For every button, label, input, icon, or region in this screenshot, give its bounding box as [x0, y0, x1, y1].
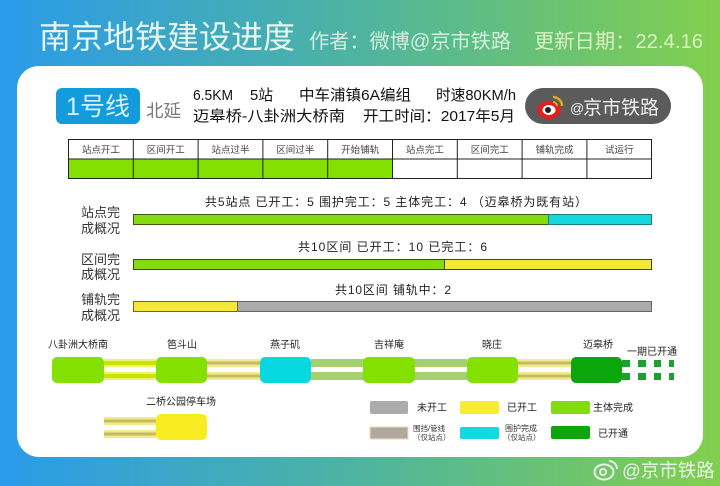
depot label: 二桥公园停车场: [146, 395, 216, 408]
legend: [370, 401, 633, 442]
station: 燕子矶: [260, 339, 311, 383]
progress table: [68, 139, 652, 179]
legend: main complete: [551, 401, 633, 414]
completed cells: [68, 159, 392, 178]
station: 晓庄: 晓庄: [482, 338, 502, 351]
extension label: 北延: [146, 101, 181, 121]
table headers: 区间过半: [276, 144, 314, 156]
icon: weibo outline: [594, 461, 617, 480]
legend: enclosure/pipeline: （仅站点）: [413, 432, 450, 442]
station: 笆斗山: 笆斗山: [167, 338, 197, 351]
update date: 更新日期：22.4.16: [534, 30, 703, 53]
phase 1 label: 一期已开通: [627, 346, 677, 358]
stats: 共10区间 铺轨中：2: [335, 282, 451, 297]
table headers: 站点过半: [211, 144, 250, 156]
stats: 共10区间 已开工：10 已完工：6: [298, 239, 487, 254]
bar: [134, 214, 652, 224]
table headers: 区间开工: [147, 144, 185, 156]
label: [81, 252, 120, 282]
track laying progress: [81, 282, 652, 323]
watermark: @京市铁路: [622, 460, 715, 481]
table headers: 站点完工: [406, 144, 444, 156]
station progress: [81, 194, 652, 236]
legend: opened: [551, 426, 628, 440]
table headers: 区间完工: [471, 144, 509, 156]
line diagram: [48, 338, 677, 383]
table headers: 试运行: [605, 144, 634, 156]
station: 八卦洲大桥南: [48, 338, 108, 383]
table headers: 铺轨完成: [535, 144, 574, 156]
station: 笆斗山: [156, 338, 207, 383]
track: main done: [311, 359, 467, 380]
legend: enclosure/pipeline: 围挡/管线: [413, 423, 446, 433]
line info: 迈皋桥-八卦洲大桥南: [193, 108, 345, 125]
station: 吉祥庵: [363, 338, 415, 383]
stations: [48, 338, 622, 383]
line info: 开工时间：2017年5月: [363, 108, 515, 125]
track: started: [207, 359, 260, 380]
station: 迈皋桥: [571, 338, 622, 383]
bar: [134, 260, 652, 270]
station: 迈皋桥: 迈皋桥: [583, 338, 613, 351]
depot track: [104, 417, 156, 438]
section progress: [81, 239, 652, 282]
station: 八卦洲大桥南: 八卦洲大桥南: [48, 338, 108, 351]
legend: started: [460, 401, 537, 414]
legend: retaining done: [460, 423, 540, 442]
track: complete: [104, 359, 156, 380]
track: started: [518, 359, 571, 380]
line info: 5站: [250, 87, 273, 104]
table headers: [82, 144, 634, 156]
legend: retaining done: 围护完成: [505, 423, 537, 433]
weibo badge: 京市铁路: [583, 97, 659, 119]
line badge: [56, 88, 140, 124]
label: [81, 292, 120, 323]
opened phase 1 dashes: [622, 360, 674, 380]
legend: not started: 未开工: [417, 402, 447, 414]
title: 南京地铁建设进度: [39, 19, 295, 55]
legend: not started: [370, 401, 447, 414]
line info: 时速80KM/h: [436, 87, 516, 104]
line info: [193, 87, 516, 125]
line info: 中车浦镇6A编组: [299, 87, 411, 104]
bar: [134, 302, 652, 312]
weibo badge: @: [570, 100, 584, 116]
icon: weibo: [537, 97, 562, 119]
legend: main complete: 主体完成: [593, 401, 633, 414]
station: 吉祥庵: 吉祥庵: [374, 338, 404, 351]
label: [81, 205, 120, 236]
label: 铺轨完: [81, 292, 120, 307]
legend: opened: 已开通: [598, 428, 628, 440]
panel: main: [17, 66, 703, 457]
legend: started: 已开工: [507, 403, 537, 414]
depot: [104, 395, 216, 440]
legend: enclosure/pipeline: [370, 423, 450, 442]
weibo badge: [525, 88, 671, 124]
station: 燕子矶: 燕子矶: [270, 339, 300, 351]
label: 成概况: [81, 221, 120, 236]
table headers: 站点开工: [82, 144, 120, 156]
line badge: 1号线: [66, 93, 130, 121]
label: 区间完: [81, 252, 120, 267]
tracks: [104, 359, 571, 380]
station: 晓庄: [467, 338, 518, 383]
legend: retaining done: （仅站点）: [503, 432, 540, 442]
stats: 共5站点 已开工：5 围护完工：5 主体完工：4 （迈皋桥为既有站）: [205, 194, 587, 209]
label: 成概况: [81, 308, 120, 323]
author: 作者：微博@京市铁路: [309, 30, 511, 53]
line info: 6.5KM: [193, 87, 233, 104]
depot block: [156, 414, 207, 440]
label: 成概况: [81, 267, 120, 282]
table headers: 开始铺轨: [341, 144, 380, 156]
label: 站点完: [81, 205, 120, 220]
